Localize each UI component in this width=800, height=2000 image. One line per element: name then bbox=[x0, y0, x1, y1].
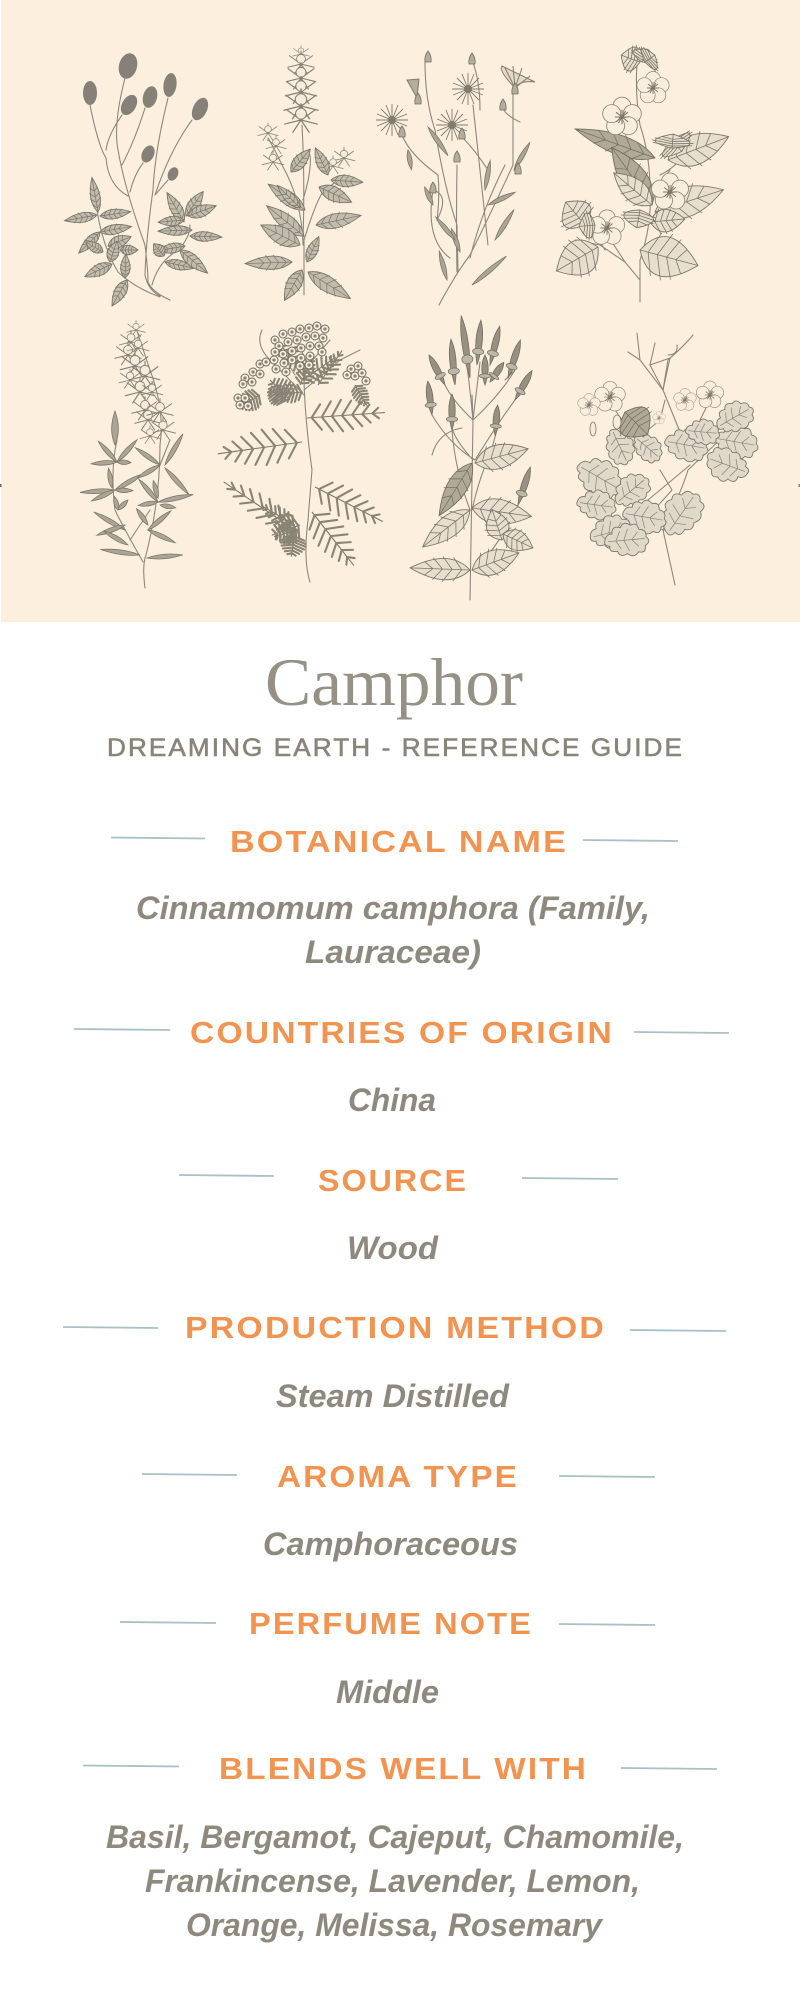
value: blends well with line 2: Frankincense, Lavender, Lemon, bbox=[145, 1863, 640, 1899]
panel: botanical illustrations background bbox=[1, 0, 800, 622]
value: botanical name line 2: Lauraceae) bbox=[305, 934, 481, 970]
value: aroma type: Camphoraceous bbox=[263, 1526, 518, 1562]
illustration: cornflower plant bbox=[376, 51, 535, 305]
value: blends well with line 1: Basil, Bergamot, Cajeput, Chamomile, bbox=[106, 1819, 684, 1855]
value: botanical name line 1: Cinnamomum camphora (Family, bbox=[136, 890, 650, 926]
illustration: verbena plant bbox=[410, 315, 538, 600]
value: production method: Steam Distilled bbox=[276, 1378, 510, 1414]
heading: aroma type: AROMA TYPE bbox=[277, 1459, 519, 1494]
illustration: mallow plant bbox=[546, 41, 735, 302]
section: perfume note bbox=[120, 1606, 655, 1710]
section: countries of origin bbox=[74, 1015, 729, 1118]
value: blends well with line 3: Orange, Melissa, Rosemary bbox=[186, 1907, 604, 1943]
section: production method bbox=[63, 1310, 726, 1414]
illustration: burnet plant bbox=[64, 51, 222, 309]
heading: botanical name: BOTANICAL NAME bbox=[230, 824, 568, 859]
illustration: needle-leaved herb bbox=[80, 320, 194, 588]
section: aroma type bbox=[142, 1459, 655, 1562]
value: countries of origin: China bbox=[348, 1082, 436, 1118]
heading: source: SOURCE bbox=[318, 1163, 468, 1198]
heading: countries of origin: COUNTRIES OF ORIGIN bbox=[190, 1015, 614, 1050]
section: source bbox=[179, 1163, 618, 1266]
section: botanical name bbox=[111, 824, 678, 970]
subtitle: DREAMING EARTH - REFERENCE GUIDE bbox=[107, 734, 684, 762]
value: perfume note: Middle bbox=[336, 1674, 439, 1710]
section: blends well with bbox=[83, 1751, 717, 1943]
heading: blends well with: BLENDS WELL WITH bbox=[219, 1751, 588, 1786]
title: Camphor bbox=[265, 644, 523, 720]
heading: production method: PRODUCTION METHOD bbox=[185, 1310, 606, 1345]
illustration: celandine plant bbox=[569, 333, 761, 585]
heading: perfume note: PERFUME NOTE bbox=[249, 1606, 533, 1641]
value: source: Wood bbox=[347, 1230, 439, 1266]
illustration: tansy plant bbox=[215, 322, 389, 582]
illustration: sage plant bbox=[245, 45, 363, 306]
